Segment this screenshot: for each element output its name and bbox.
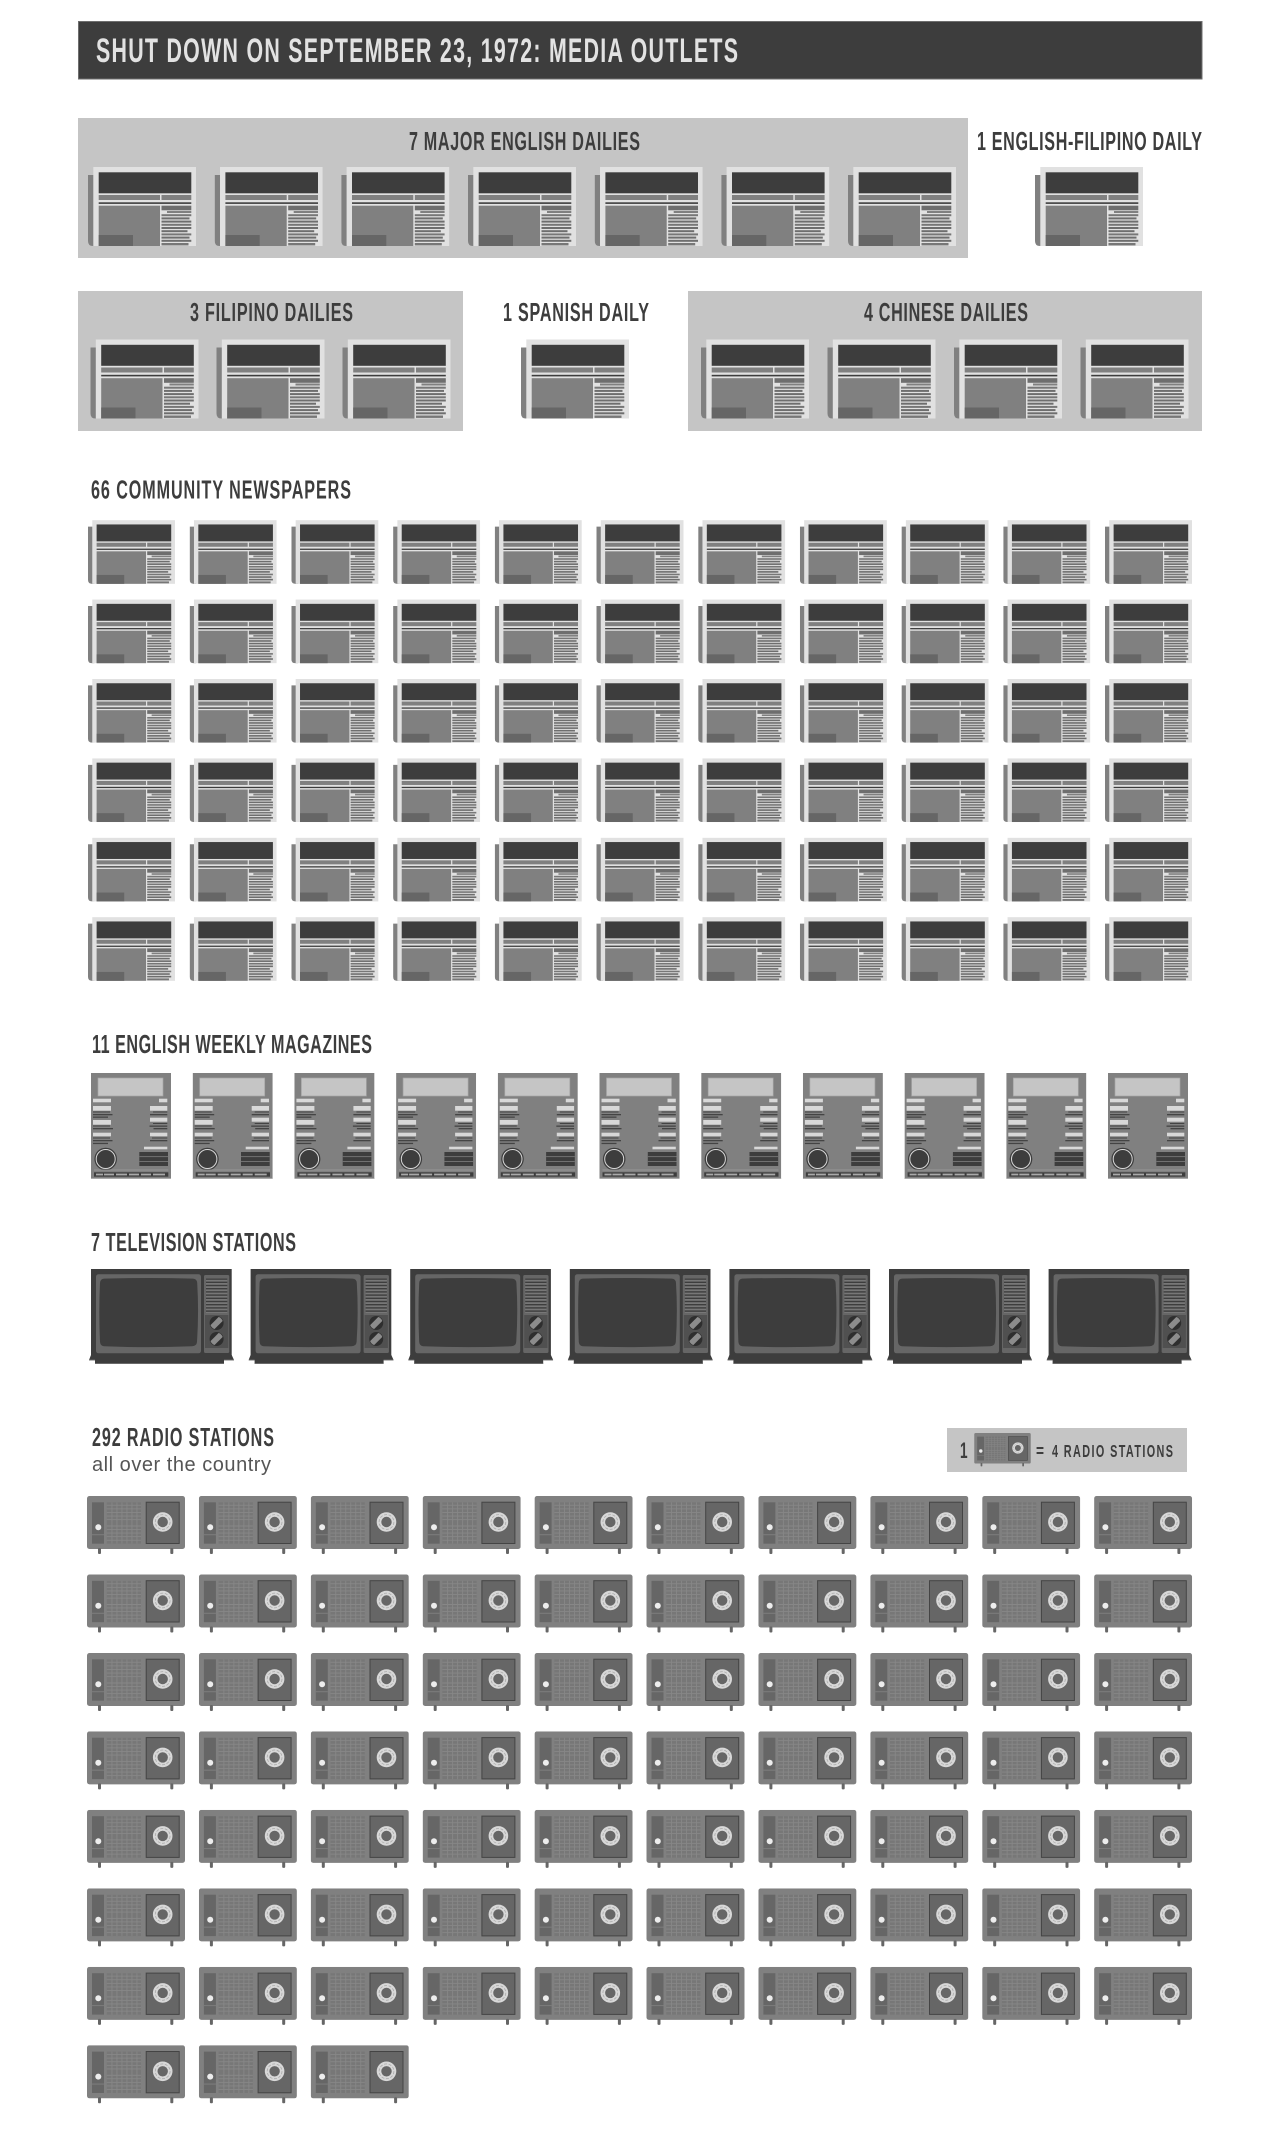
- panel: 7 major English dailies: [78, 118, 968, 258]
- icons: newspapers: [90, 340, 450, 418]
- title bar: [78, 22, 1202, 79]
- icons: newspapers: [88, 167, 956, 246]
- legend: 1 radio = 4 radio stations: [947, 1428, 1187, 1472]
- grid: 73 radios: [87, 1496, 1192, 2103]
- grid: 66 community newspapers: [88, 520, 1192, 981]
- heading: 7 television stations: 7 TELEVISION STATIONS: [91, 1227, 296, 1257]
- block: 1 English-Filipino daily: [977, 126, 1202, 246]
- icons: newspapers: [701, 340, 1188, 418]
- heading: 3 Filipino dailies: 3 FILIPINO DAILIES: [190, 297, 353, 327]
- block: 1 Spanish daily: [503, 297, 649, 418]
- heading: 66 community newspapers: 66 COMMUNITY NEWSPAPERS: [91, 474, 351, 505]
- heading: 292 radio stations: 292 RADIO STATIONS: [92, 1422, 274, 1452]
- panel: 4 Chinese dailies: [688, 291, 1202, 431]
- row: 7 television sets: [89, 1269, 1192, 1364]
- legend: 1 radio = 4 radio stations: 1: [960, 1438, 968, 1463]
- subheading: all over the country: [92, 1454, 271, 1476]
- block: 1 English-Filipino daily: 1 ENGLISH-FILIPINO DAILY: [977, 126, 1202, 156]
- heading: 7 major English dailies: 7 MAJOR ENGLISH DAILIES: [409, 126, 640, 156]
- panel: 3 Filipino dailies: [78, 291, 463, 431]
- row: 11 magazines: [91, 1073, 1188, 1179]
- legend: 1 radio = 4 radio stations: =: [1036, 1441, 1044, 1461]
- heading: 4 Chinese dailies: 4 CHINESE DAILIES: [864, 297, 1028, 327]
- legend: 1 radio = 4 radio stations: 4 RADIO STATIONS: [1052, 1443, 1173, 1462]
- heading: 11 English weekly magazines: 11 ENGLISH WEEKLY MAGAZINES: [92, 1029, 372, 1059]
- block: 1 Spanish daily: 1 SPANISH DAILY: [503, 297, 649, 327]
- title bar: SHUT DOWN ON SEPTEMBER 23, 1972: MEDIA OUTLETS: [96, 32, 738, 70]
